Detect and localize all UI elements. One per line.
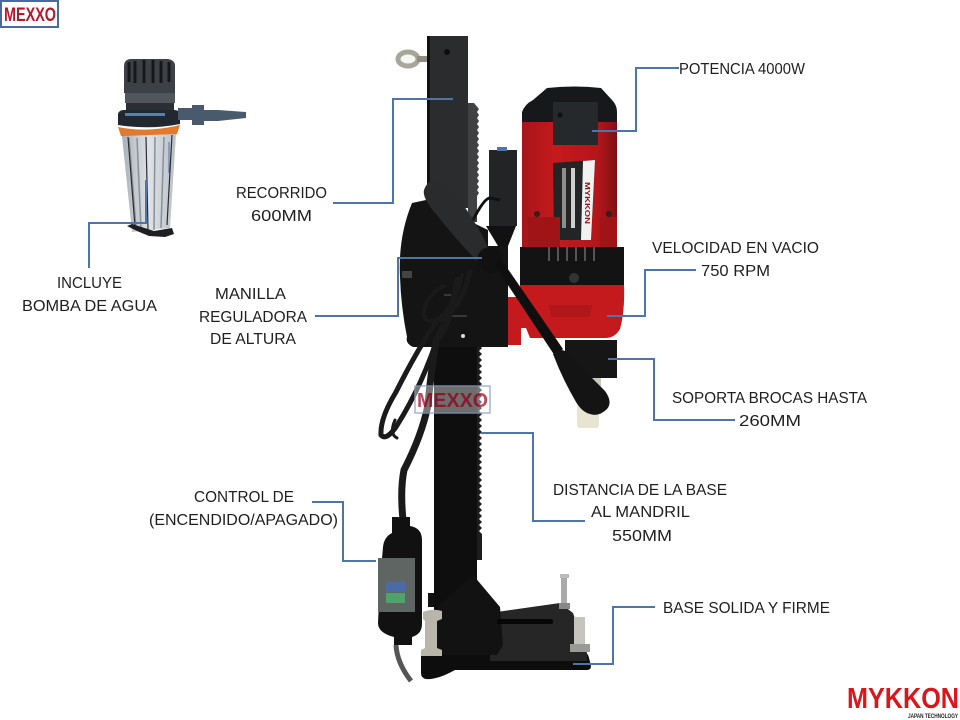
bolts — [421, 574, 590, 656]
callout: manilla reguladora: REGULADORA — [199, 309, 307, 326]
carriage — [400, 200, 508, 347]
callout: soporta brocas: 260MM — [739, 413, 801, 430]
callout: base solida: BASE SOLIDA Y FIRME — [663, 600, 830, 617]
callout: incluye bomba de agua — [22, 142, 169, 315]
upper handle — [424, 180, 492, 264]
callout: recorrido — [236, 99, 453, 225]
core bit — [577, 378, 601, 428]
control cable lower — [396, 645, 411, 681]
callout: recorrido: 600MM — [251, 208, 312, 225]
callout: recorrido: RECORRIDO — [236, 185, 327, 202]
rack upper — [468, 103, 479, 222]
callout: velocidad en vacio: 750 RPM — [701, 263, 770, 280]
control box — [378, 517, 422, 645]
callout: incluye bomba de agua: BOMBA DE AGUA — [22, 298, 157, 315]
label plate: MYKKON — [583, 182, 590, 224]
hub — [477, 247, 503, 273]
gearbox red — [508, 285, 624, 345]
eye bolt — [398, 52, 427, 66]
callout: distancia base mandril: DISTANCIA DE LA BASE — [553, 482, 727, 499]
callout: control encendido apagado: CONTROL DE — [194, 489, 294, 506]
logo: Mexxo: MEXXO — [4, 5, 56, 26]
lower handle — [494, 259, 563, 356]
motor cap — [522, 86, 617, 125]
motor fin band — [520, 247, 624, 285]
chuck — [565, 340, 617, 378]
cable to switch — [472, 198, 500, 222]
callout: distancia base mandril: 550MM — [612, 528, 672, 545]
base — [421, 574, 591, 679]
callout: distancia base mandril: AL MANDRIL — [591, 504, 690, 521]
column upper — [427, 36, 468, 208]
callout: potencia: POTENCIA 4000W — [679, 61, 806, 78]
callout: distancia base mandril — [481, 433, 727, 545]
callout: manilla reguladora: MANILLA — [215, 286, 286, 303]
callout: velocidad en vacio: VELOCIDAD EN VACIO — [652, 240, 819, 257]
callout: potencia — [592, 61, 806, 131]
logo: Mexxo — [1, 1, 58, 27]
illustration: drill stand — [378, 36, 624, 681]
callout: manilla reguladora: DE ALTURA — [210, 331, 296, 348]
label plate — [553, 160, 595, 240]
callout: control encendido apagado — [149, 489, 376, 561]
callout: manilla reguladora — [199, 258, 482, 348]
column lower — [434, 340, 477, 610]
switch box — [486, 147, 517, 246]
rack lower — [477, 345, 482, 560]
motor body — [522, 102, 617, 250]
callout: incluye bomba de agua: INCLUYE — [57, 275, 122, 292]
callout: velocidad en vacio — [607, 240, 819, 316]
callout: soporta brocas: SOPORTA BROCAS HASTA — [672, 390, 867, 407]
watermark: MEXXO — [417, 390, 488, 412]
cable bundle — [381, 272, 470, 520]
callout: control encendido apagado: (ENCENDIDO/APAGADO) — [149, 512, 338, 529]
callout: base solida — [573, 600, 830, 664]
callout: soporta brocas — [608, 359, 867, 430]
illustration: water pump — [118, 59, 246, 237]
